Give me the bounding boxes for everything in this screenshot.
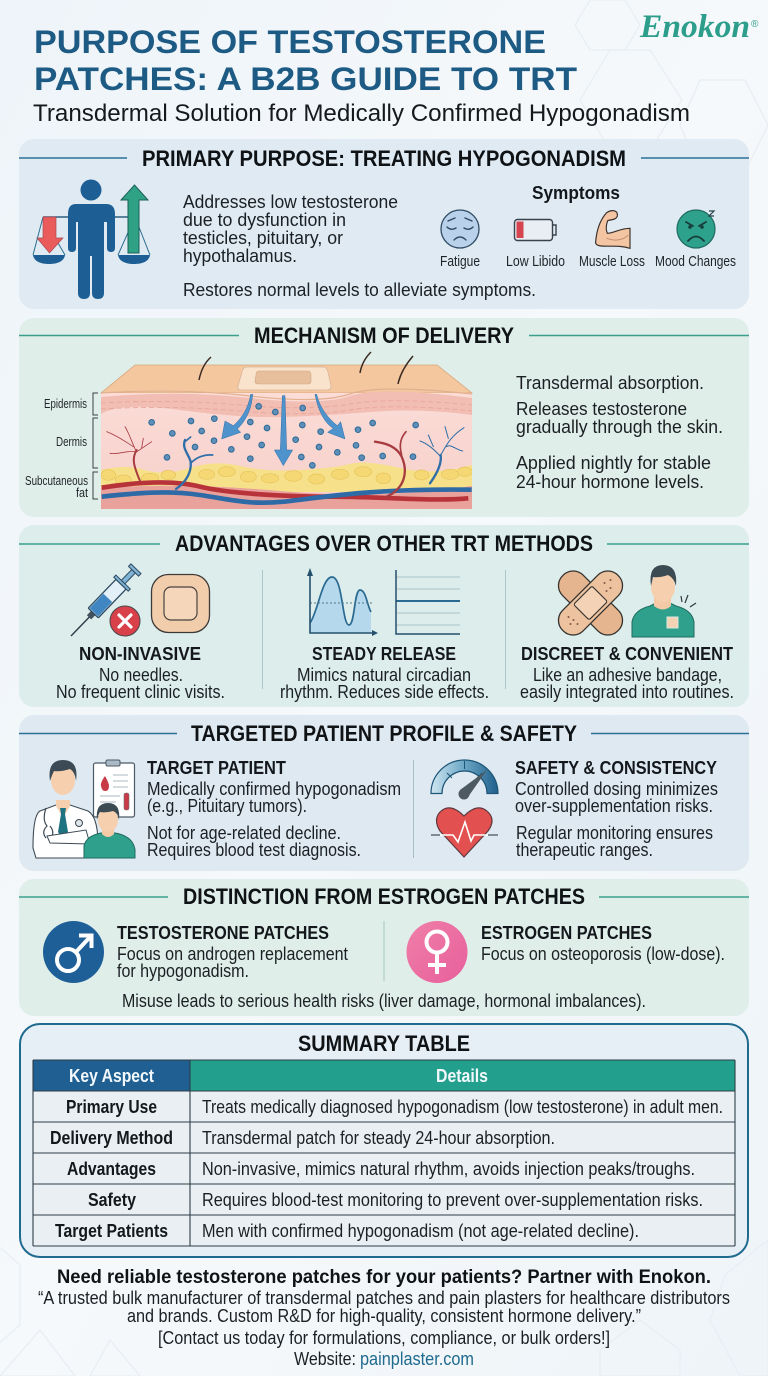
- label: mood changes: Mood Changes: [655, 254, 736, 270]
- table row labels: [50, 1096, 173, 1241]
- table row labels: Safety: [88, 1189, 137, 1210]
- table row labels: Target Patients: [55, 1220, 168, 1241]
- text: delivery description: gradually through the skin.: [516, 416, 723, 437]
- text: safety and consistency: [515, 757, 718, 860]
- heading: patient profile: TARGETED PATIENT PROFILE & SAFETY: [191, 721, 577, 746]
- text: target patient: (e.g., Pituitary tumors).: [147, 795, 307, 816]
- table row labels: Advantages: [67, 1158, 156, 1179]
- text: safety and consistency: SAFETY & CONSISTENCY: [515, 757, 717, 778]
- text: description: hypothalamus.: [183, 245, 297, 266]
- table header: Details: [436, 1066, 488, 1086]
- icon: female symbol: [406, 921, 468, 983]
- labels: skin layers: [25, 393, 98, 500]
- text: target patient: [147, 757, 401, 860]
- table details: Transdermal patch for steady 24-hour absorption.: [202, 1127, 555, 1148]
- website: Website:: [294, 1348, 356, 1369]
- arrows: absorption: [222, 394, 345, 466]
- icon: syringe crossed out and patch: [64, 562, 209, 643]
- table row labels: Primary Use: [66, 1096, 157, 1117]
- text: non-invasive: NON-INVASIVE: [79, 643, 201, 664]
- text: discreet and convenient: Like an adhesive bandage,: [533, 664, 722, 685]
- title: [34, 24, 577, 97]
- text: delivery description: Transdermal absorption.: [516, 372, 704, 393]
- icon: person balancing hormone scales: [33, 180, 150, 299]
- text: misuse warning: Misuse leads to serious health risks (liver damage, hormonal imbalances).: [122, 990, 646, 1011]
- text: description: [183, 191, 536, 300]
- footer headline: Need reliable testosterone patches for your patients? Partner with Enokon.: [57, 1266, 711, 1288]
- table: [33, 1060, 735, 1246]
- icon: dosage gauge: [431, 760, 498, 800]
- diagram: skin cross-section: [101, 352, 472, 509]
- text: testosterone patches: Focus on androgen replacement: [117, 943, 348, 964]
- heading: summary table: SUMMARY TABLE: [298, 1031, 470, 1056]
- website: painplaster.com: [360, 1348, 474, 1369]
- logo: Enokon: Enokon: [639, 9, 750, 45]
- text: estrogen patches: Focus on osteoporosis (low-dose).: [481, 943, 725, 964]
- text: non-invasive: No needles.: [99, 664, 183, 685]
- table row labels: Delivery Method: [50, 1127, 173, 1148]
- table details: Requires blood-test monitoring to prevent over-supplementation risks.: [202, 1189, 703, 1210]
- text: non-invasive: No frequent clinic visits.: [56, 681, 225, 702]
- labels: skin layers: Dermis: [56, 435, 87, 449]
- footer description: [38, 1287, 730, 1348]
- text: delivery description: 24-hour hormone levels.: [516, 471, 704, 492]
- icon: heart with pulse: [431, 808, 498, 857]
- text: estrogen patches: ESTROGEN PATCHES: [481, 922, 652, 943]
- heading: mechanism: MECHANISM OF DELIVERY: [254, 323, 514, 348]
- text: description: Restores normal levels to alleviate symptoms.: [183, 279, 536, 300]
- table header: Key Aspect: [69, 1066, 154, 1086]
- subtitle: Transdermal Solution for Medically Confirmed Hypogonadism: [33, 100, 690, 127]
- text: estrogen patches: [481, 922, 725, 964]
- text: description: due to dysfunction in: [183, 209, 346, 230]
- icon: low battery: [514, 220, 556, 240]
- panel: mechanism of delivery: [19, 318, 749, 517]
- text: discreet and convenient: easily integrated into routines.: [520, 681, 734, 702]
- text: steady release: STEADY RELEASE: [312, 643, 456, 664]
- icon: fatigue face: [441, 210, 479, 248]
- text: steady release: Mimics natural circadian: [297, 664, 471, 685]
- table header: [69, 1066, 488, 1086]
- footer description: and brands. Custom R&D for high-quality, consistent hormone delivery.”: [127, 1305, 641, 1326]
- heading: primary purpose: PRIMARY PURPOSE: TREATING HYPOGONADISM: [142, 146, 626, 171]
- text: target patient: Not for age-related decline.: [147, 822, 341, 843]
- panel: summary table: [20, 1024, 748, 1257]
- labels: skin layers: Subcutaneous: [25, 474, 88, 488]
- chart: peaks vs steady release: [307, 568, 460, 636]
- hairs: [199, 352, 413, 384]
- icon: doctor, patient and clipboard: [33, 760, 135, 858]
- text: testosterone patches: TESTOSTERONE PATCHES: [117, 922, 329, 943]
- text: non-invasive: [56, 643, 225, 702]
- label: muscle loss: Muscle Loss: [579, 254, 645, 270]
- text: description: testicles, pituitary, or: [183, 227, 343, 248]
- label: low libido: Low Libido: [506, 254, 565, 270]
- labels: skin layers: fat: [76, 486, 88, 500]
- footer description: [Contact us today for formulations, compliance, or bulk orders!]: [158, 1327, 610, 1348]
- heading: advantages: ADVANTAGES OVER OTHER TRT METHODS: [175, 531, 593, 556]
- text: testosterone patches: for hypogonadism.: [117, 960, 249, 981]
- text: safety and consistency: therapeutic ranges.: [516, 839, 653, 860]
- text: target patient: Requires blood test diagnosis.: [147, 839, 361, 860]
- icon: male symbol: [43, 921, 104, 983]
- text: target patient: TARGET PATIENT: [147, 757, 286, 778]
- text: discreet and convenient: DISCREET & CONVENIENT: [521, 643, 733, 664]
- text: delivery description: [516, 372, 723, 492]
- text: safety and consistency: over-supplementation risks.: [515, 795, 713, 816]
- text: target patient: Medically confirmed hypogonadism: [147, 778, 401, 799]
- icon: patch on skin: [238, 367, 331, 390]
- labels: skin layers: Epidermis: [44, 397, 87, 411]
- text: steady release: rhythm. Reduces side effects.: [280, 681, 489, 702]
- table details: [202, 1096, 723, 1241]
- text: testosterone patches: [117, 922, 348, 981]
- panel: distinction from estrogen patches: [19, 879, 749, 1016]
- footer: call to action: [38, 1266, 730, 1369]
- text: steady release: [280, 643, 489, 702]
- logo: Enokon: ®: [751, 19, 759, 30]
- panel: primary purpose: [19, 139, 749, 309]
- text: discreet and convenient: [520, 643, 734, 702]
- panel: advantages: [19, 525, 749, 707]
- text: safety and consistency: Controlled dosing minimizes: [515, 778, 718, 799]
- text: description: Addresses low testosterone: [183, 191, 398, 212]
- table details: Non-invasive, mimics natural rhythm, avoids injection peaks/troughs.: [202, 1158, 695, 1179]
- table details: Men with confirmed hypogonadism (not age-related decline).: [202, 1220, 639, 1241]
- heading: symptoms: Symptoms: [532, 182, 620, 203]
- icon: muscle arm: [596, 211, 630, 248]
- text: delivery description: Applied nightly for stable: [516, 452, 711, 473]
- label: fatigue: Fatigue: [440, 254, 480, 270]
- title: PATCHES: A B2B GUIDE TO TRT: [34, 61, 577, 97]
- icon: mood face: [677, 210, 715, 248]
- title: PURPOSE OF TESTOSTERONE: [34, 24, 546, 60]
- icon: bandage and man wearing patch: [553, 565, 696, 641]
- panel: patient profile and safety: [19, 715, 749, 871]
- text: safety and consistency: Regular monitoring ensures: [516, 822, 713, 843]
- website: [294, 1348, 474, 1369]
- text: delivery description: Releases testosterone: [516, 398, 687, 419]
- heading: distinction: DISTINCTION FROM ESTROGEN PATCHES: [183, 884, 585, 909]
